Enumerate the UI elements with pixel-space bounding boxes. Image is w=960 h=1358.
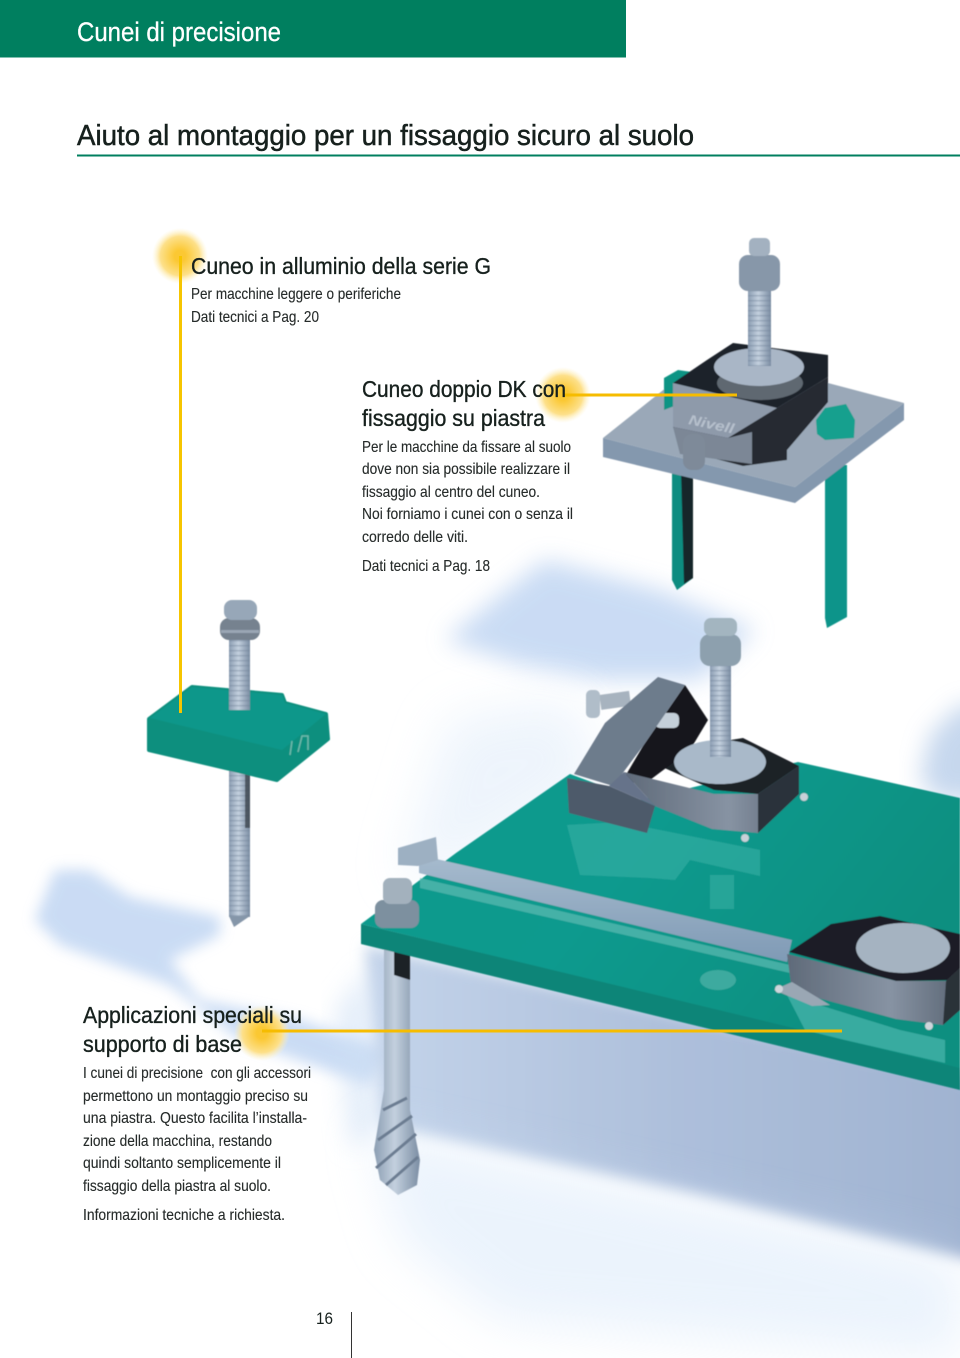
text block: DK double wedge bbox=[362, 376, 573, 575]
text block: special applications: zione della macchina, restando bbox=[83, 1133, 272, 1150]
illustration: DK double wedge on plate bbox=[603, 238, 904, 628]
text block: special applications: supporto di base bbox=[83, 1031, 242, 1057]
illustration: base plate with wedges and drill anchor bbox=[361, 618, 960, 1195]
page number: 16 bbox=[316, 1309, 333, 1328]
header title: Cunei di precisione bbox=[77, 17, 281, 47]
text block: DK double wedge: Dati tecnici a Pag. 18 bbox=[362, 558, 490, 575]
text block: aluminium wedge G: Dati tecnici a Pag. 20 bbox=[191, 309, 319, 326]
text block: aluminium wedge G: Per macchine leggere o periferiche bbox=[191, 286, 401, 303]
long rail bbox=[419, 855, 792, 962]
main title with rule: Aiuto al montaggio per un fissaggio sicuro al suolo bbox=[77, 120, 694, 152]
page number bbox=[316, 1309, 352, 1358]
yellow leader marker: DK wedge bbox=[535, 367, 737, 423]
text block: special applications: Informazioni tecniche a richiesta. bbox=[83, 1207, 285, 1224]
text block: DK double wedge: corredo delle viti. bbox=[362, 529, 468, 546]
header band bbox=[0, 0, 626, 58]
illustration: aluminium wedge G series with bolt bbox=[149, 600, 328, 927]
text block: aluminium wedge G bbox=[191, 253, 491, 326]
floor shadows bbox=[35, 560, 960, 1358]
text block: special applications: quindi soltanto semplicemente il bbox=[83, 1155, 281, 1172]
anchor drill bbox=[374, 940, 420, 1195]
plate side bbox=[361, 924, 960, 1090]
side bolt bbox=[683, 434, 705, 470]
text block: special applications: I cunei di precisione con gli accessori bbox=[83, 1065, 311, 1082]
text block: DK double wedge: fissaggio al centro del cuneo. bbox=[362, 484, 540, 501]
text block: aluminium wedge G: Cuneo in alluminio della serie G bbox=[191, 253, 491, 279]
right wedge bbox=[774, 916, 960, 1030]
green rear nut bbox=[664, 370, 692, 410]
threaded rod with nut bbox=[748, 288, 771, 366]
plate top bbox=[361, 762, 960, 1068]
middle wedge assembly bbox=[567, 618, 808, 842]
green front nut bbox=[816, 404, 855, 440]
text block: special applications bbox=[83, 1002, 311, 1224]
corner bolt bbox=[375, 900, 419, 928]
octagonal box bbox=[673, 343, 828, 408]
text block: special applications: Applicazioni speciali su bbox=[83, 1002, 302, 1028]
text block: DK double wedge: Cuneo doppio DK con bbox=[362, 376, 566, 402]
text block: DK double wedge: dove non sia possibile realizzare il bbox=[362, 461, 570, 478]
text block: DK double wedge: fissaggio su piastra bbox=[362, 405, 545, 431]
text block: special applications: permettono un montaggio preciso su bbox=[83, 1088, 308, 1105]
base plate bbox=[603, 403, 904, 503]
text block: special applications: fissaggio della piastra al suolo. bbox=[83, 1178, 271, 1195]
plate reflections bbox=[420, 822, 945, 1063]
ground anchor legs bbox=[672, 465, 847, 628]
yellow leader marker: aluminium wedge bbox=[152, 228, 208, 713]
yellow leader marker: base plate bbox=[234, 1005, 842, 1061]
text block: DK double wedge: Noi forniamo i cunei con o senza il bbox=[362, 506, 573, 523]
text block: special applications: una piastra. Questo facilita l’installa- bbox=[83, 1110, 307, 1127]
text block: DK double wedge: Per le macchine da fissare al suolo bbox=[362, 439, 571, 456]
illustration: DK double wedge on plate: Nivell bbox=[687, 411, 737, 437]
